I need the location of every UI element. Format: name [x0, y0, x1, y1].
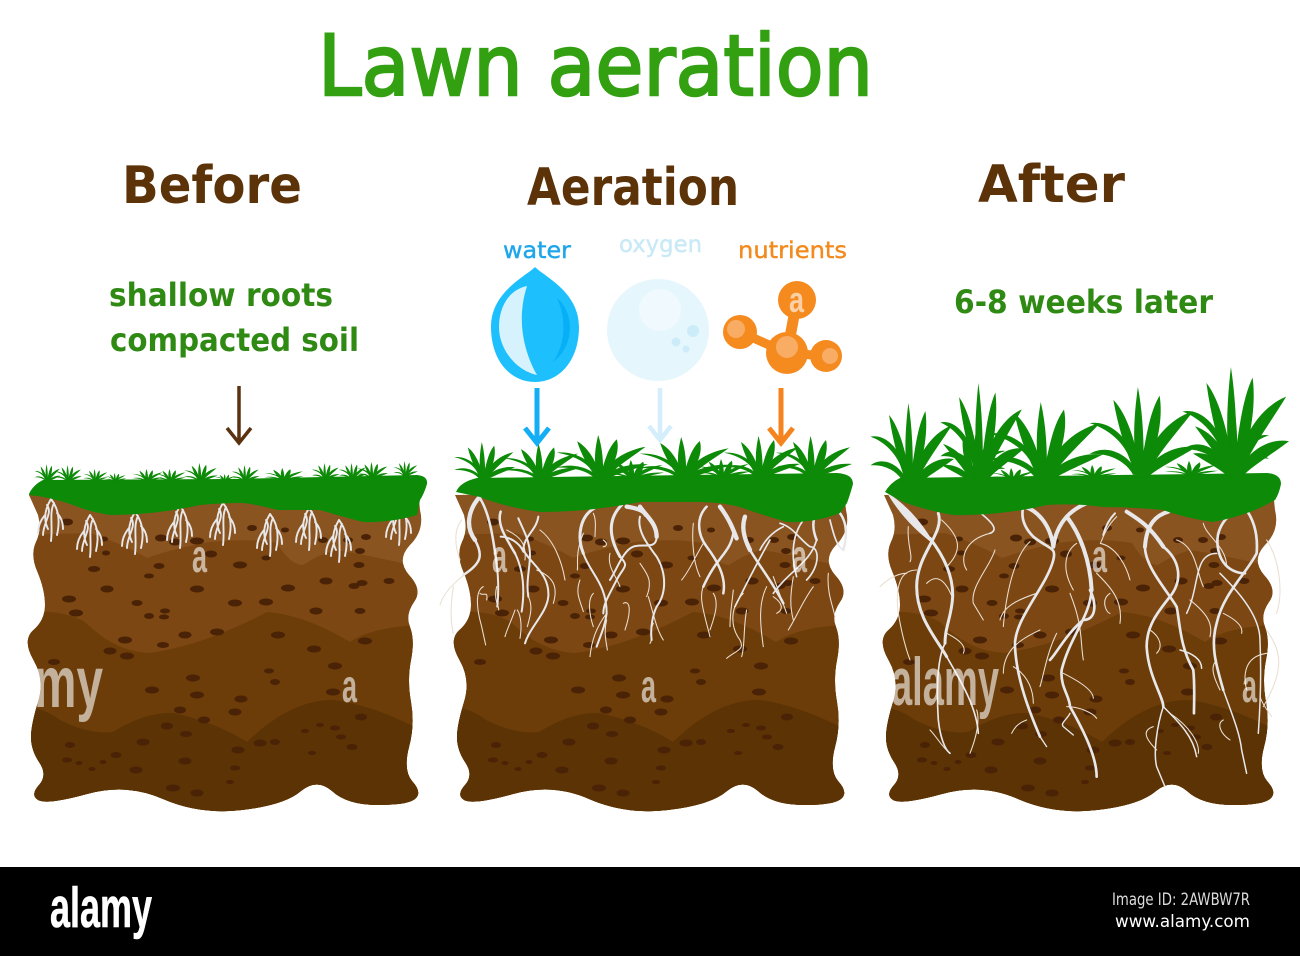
- footer url: www.alamy.com: [1115, 912, 1250, 932]
- heading: after: After: [978, 155, 1125, 215]
- roots: aeration: [440, 497, 846, 658]
- label: oxygen: oxygen: [619, 232, 702, 258]
- label: water: water: [503, 238, 572, 264]
- watermark: letter: a: [492, 530, 507, 582]
- grass blades: [35, 461, 418, 482]
- label: nutrients: nutrients: [738, 238, 847, 264]
- roots: after: [880, 494, 1280, 787]
- watermark: alamy right: alamy: [891, 644, 999, 720]
- icon: water drop: [491, 267, 579, 382]
- panel: aeration soil: [440, 435, 856, 820]
- footer bar: [0, 867, 1300, 956]
- arrow: water: [525, 388, 549, 444]
- icon: nutrient molecule: a: [789, 279, 805, 320]
- icon: oxygen bubble: [607, 279, 709, 381]
- title: Lawn aeration: [318, 17, 873, 115]
- grass mat: [29, 475, 427, 522]
- heading: before: Before: [122, 156, 302, 216]
- text: before description: [109, 276, 359, 359]
- panel: before soil: [20, 461, 430, 820]
- watermark letter: a: [1092, 530, 1107, 582]
- text: before description: shallow roots: [109, 276, 333, 314]
- shallow roots: [38, 499, 411, 562]
- arrow: before: [227, 386, 251, 443]
- grass blades: [870, 367, 1289, 486]
- watermark: letter: a: [342, 660, 357, 712]
- watermark: alamy left: my: [34, 643, 103, 723]
- text: after description: 6-8 weeks later: [954, 283, 1213, 321]
- watermark: letter: a: [192, 530, 207, 582]
- arrow: oxygen: [649, 388, 671, 440]
- heading: aeration: Aeration: [527, 158, 739, 218]
- grass mat: [885, 473, 1281, 522]
- grass mat: [456, 473, 853, 522]
- icon: nutrient molecule: [723, 279, 842, 374]
- watermark: letter: a: [792, 530, 807, 582]
- watermark: letter: a: [1242, 660, 1257, 712]
- grass blades: [454, 435, 852, 479]
- footer image id: Image ID: 2AWBW7R: [1112, 890, 1250, 910]
- arrow: nutrients: [769, 388, 793, 444]
- footer logo: alamy: [50, 876, 152, 940]
- text: before description: compacted soil: [110, 321, 359, 359]
- panel: after soil: [870, 367, 1289, 820]
- watermark letter: a: [641, 660, 656, 712]
